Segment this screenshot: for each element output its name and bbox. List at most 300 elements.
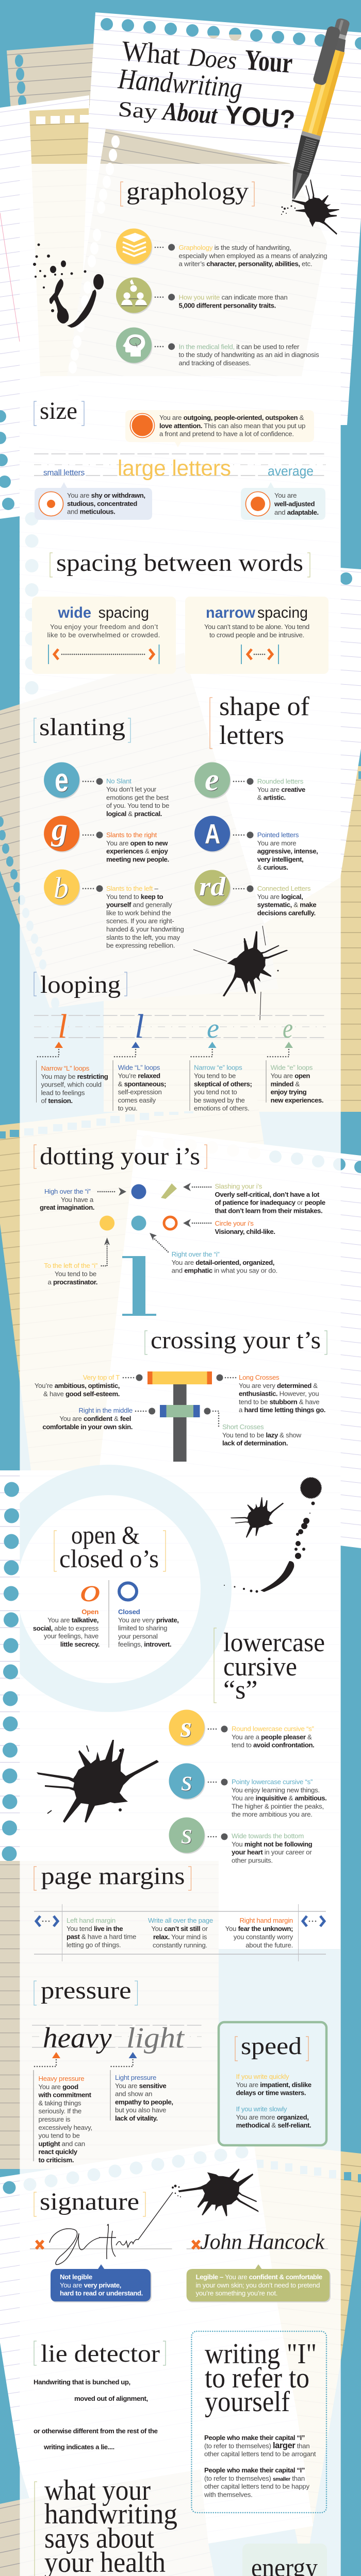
heading: lowercase cursive s: “s” — [223, 1675, 257, 1705]
section: graphology — [33, 178, 327, 367]
callout: legible: you’re something you’re not. — [196, 2290, 277, 2297]
item: no slant: logical & practical. — [106, 810, 162, 818]
heading: open & closed o's: open & — [71, 1520, 140, 1549]
wide e loops: Wide “e” loops — [271, 1064, 313, 1072]
panel: wide spacing: spacing — [99, 604, 149, 621]
text: write slowly: methodical & self-reliant. — [236, 2122, 311, 2129]
panel: wide spacing: like to be overwhelmed or crowded. — [47, 631, 160, 639]
label: high over: great imagination. — [40, 1204, 94, 1211]
large ink splatter — [37, 1740, 159, 1823]
light pressure: and show an — [115, 2090, 152, 2098]
heading: writing I — [205, 2338, 317, 2418]
wide l loops: & spontaneous; — [118, 1080, 166, 1088]
label: short crosses — [204, 1408, 302, 1447]
title: Does — [187, 42, 238, 75]
ink drips — [33, 243, 104, 328]
closed o: Closed — [118, 1608, 140, 1616]
label: long crosses: a hard time letting things go. — [239, 1406, 325, 1414]
panel: wide spacing — [32, 597, 176, 674]
wide l loops: l — [135, 1008, 144, 1045]
item: wide s — [169, 1818, 313, 1864]
label: to the left: You tend to be — [55, 1270, 96, 1278]
wide e loops: e — [283, 1013, 293, 1044]
item: slants right: Slants to the right — [106, 831, 157, 839]
label: right over: You are detail-oriented, organized, — [172, 1259, 274, 1266]
item: pointed letters: & curious. — [257, 863, 288, 871]
item: connected letters: rd — [199, 872, 226, 902]
section: looping — [34, 971, 326, 1112]
wide e loops: minded & — [271, 1080, 300, 1088]
title — [117, 35, 296, 134]
item: pointy s — [169, 1763, 326, 1818]
connector dots — [155, 343, 175, 350]
item: wide s: your heart in your career or — [232, 1849, 311, 1856]
item: wide s: other pursuits. — [232, 1856, 273, 1864]
heading: signature: signature — [40, 2188, 139, 2215]
item: slants left: Slants to the left – — [106, 885, 158, 892]
narrow e loops — [189, 1013, 252, 1112]
callout: not legible: hard to read or understand. — [60, 2290, 143, 2297]
narrow l loops: of tension. — [41, 1097, 73, 1105]
item: slants left: yourself and generally — [106, 901, 172, 909]
size samples: small letters — [43, 469, 85, 478]
closed o: your personal — [118, 1632, 158, 1640]
item: pointed letters: very intelligent, — [257, 855, 303, 863]
label: circle: Circle your i’s — [215, 1219, 254, 1227]
heavy pressure: pressure is — [38, 2115, 71, 2123]
item: pointed letters — [194, 816, 318, 871]
narrow e loops: you tend not to — [194, 1088, 237, 1096]
text: medical field: to the study of handwriting as an aid in diagnosis — [178, 351, 319, 359]
write all over the page — [148, 1917, 213, 1949]
open o — [33, 1573, 101, 1648]
text: definition: especially when employed as a means of analyzing — [178, 252, 327, 260]
open o: little secrecy. — [60, 1640, 100, 1648]
section: page margins — [34, 1862, 326, 1961]
heading: health — [35, 2475, 177, 2576]
item: slants left: like to work behind the — [106, 909, 171, 917]
right hand margin: you constantly worry — [234, 1933, 293, 1941]
item: slants right — [44, 812, 169, 863]
section: signature — [30, 2188, 331, 2302]
text: lie detector lines: Handwriting that is bunched up, — [34, 2378, 130, 2386]
item: pointed letters: You are more — [257, 839, 296, 847]
callout: large letters — [125, 410, 314, 447]
text: larger: People who make their capital “I” — [204, 2434, 305, 2442]
label: long crosses: tend to be stubborn & have — [239, 1398, 319, 1405]
label: slashing: Slashing your i’s — [215, 1182, 262, 1190]
heading: spacing between words: spacing between words — [56, 549, 303, 577]
callout: average letters: You are — [274, 492, 297, 499]
open o: your feelings, have — [44, 1632, 99, 1640]
item: pointy s: s — [181, 1765, 192, 1797]
item: rounded letters — [194, 762, 305, 802]
label: very top: Very top of T — [83, 1374, 120, 1381]
item: no slant: e — [55, 761, 69, 799]
text: smaller: other capital letters tend to be happy — [204, 2483, 309, 2490]
heading: shape of letters — [210, 692, 310, 750]
heavy pressure: uptight and can — [38, 2140, 85, 2147]
write all over the page: You can’t sit still or — [151, 1925, 208, 1933]
item: pointy s: the more ambitious you are. — [232, 1810, 313, 1818]
ink splatter — [193, 922, 299, 1020]
panel: wide spacing: You enjoy your freedom and don’t — [50, 623, 158, 631]
label: to the left — [44, 1238, 110, 1286]
item: round s: s — [180, 1711, 192, 1743]
size samples: average — [268, 463, 314, 479]
letter T with crossbars — [147, 1371, 212, 1462]
left hand margin: letting go of things. — [67, 1941, 121, 1948]
item: slants right: meeting new people. — [106, 855, 169, 863]
panel: narrow spacing: narrow — [206, 604, 256, 621]
connector dots — [155, 294, 175, 300]
label: slashing: of patience for inadequacy or people — [215, 1199, 325, 1207]
narrow l loops: You may be restricting — [41, 1073, 108, 1080]
heavy pressure: & taking things — [38, 2099, 81, 2107]
closed o: You are very private, — [118, 1616, 179, 1624]
item: connected letters: decisions carefully. — [257, 909, 316, 917]
label: long crosses: You are very determined & — [239, 1382, 318, 1389]
callout: not legible: You are very private, — [60, 2281, 121, 2289]
wide e loops: new experiences. — [271, 1096, 323, 1104]
item: rounded letters: e — [205, 762, 219, 798]
item: no slant: No Slant — [106, 777, 132, 785]
label: right over — [150, 1233, 277, 1275]
label: circle: Visionary, child-like. — [215, 1228, 275, 1235]
label: to the left: To the left of the “i” — [44, 1262, 97, 1269]
section: slanting — [34, 714, 184, 950]
open o: o — [80, 1573, 101, 1608]
section: crossing your t's — [35, 1327, 327, 1462]
text: write slowly: If you write slowly — [236, 2105, 287, 2113]
text: definition: a writer’s character, personality, abilities, etc. — [178, 260, 312, 268]
item: pointed letters: A — [205, 819, 220, 850]
item: slants right: experiences & enjoy — [106, 848, 168, 855]
item: connected letters: You are logical, — [257, 893, 303, 901]
heading: writing I: to refer to — [205, 2362, 309, 2394]
light pressure: empathy to people, — [115, 2098, 173, 2106]
ink splatter and drips — [224, 1478, 321, 1593]
title: About — [161, 96, 219, 129]
write all over the page: relax. Your mind is — [153, 1933, 207, 1941]
wide l loops: to you. — [118, 1105, 137, 1112]
narrow e loops: Narrow “e” loops — [194, 1064, 242, 1072]
label: long crosses — [217, 1374, 325, 1414]
label: very top: & have good self-esteem. — [43, 1390, 120, 1398]
label: slashing: that don’t learn from their mistakes. — [215, 1207, 322, 1214]
heading: lowercase cursive s — [214, 1628, 325, 1705]
item: no slant — [44, 761, 169, 818]
label: to the left: a procrastinator. — [47, 1278, 97, 1286]
left hand margin: You tend live in the — [67, 1925, 123, 1933]
label: short crosses: lack of determination. — [222, 1439, 288, 1447]
heading: writing I: yourself — [205, 2386, 290, 2418]
item: rounded letters: & artistic. — [257, 794, 286, 802]
legible signature: John Hancock — [200, 2230, 325, 2254]
item: no slant: emotions get the best — [106, 793, 169, 801]
heavy pressure: excessively heavy, — [38, 2124, 92, 2131]
callout: average letters: and adaptable. — [274, 509, 319, 516]
heavy pressure — [34, 2022, 112, 2164]
icon: stack of books — [116, 229, 153, 265]
label: long crosses: Long Crosses — [239, 1374, 280, 1381]
item: wide s: Wide towards the bottom — [232, 1832, 304, 1840]
item: round s — [169, 1709, 314, 1749]
item: slants left: slants to the left, you may — [106, 934, 180, 941]
item: wide s: You might not be following — [232, 1840, 312, 1848]
text: lie detector lines — [34, 2378, 158, 2451]
wide l loops — [113, 1008, 166, 1112]
item: slants left — [44, 870, 184, 950]
narrow l loops: l — [58, 1008, 67, 1045]
heading: writing I: writing "I" — [205, 2338, 317, 2370]
wide e loops — [266, 1013, 323, 1104]
right hand margin: about the future. — [245, 1941, 293, 1949]
section: open and closed o's — [33, 1520, 179, 1648]
heavy pressure: react quickly — [38, 2148, 78, 2156]
callout: large letters: a front and pretend to have a lot of confidence. — [159, 430, 294, 438]
panel: narrow spacing: to crowd people and be intrusive. — [209, 631, 304, 639]
icon: head with brain — [116, 328, 153, 364]
title: What — [121, 35, 182, 72]
callout: small letters: studious, concentrated — [67, 500, 137, 507]
callout: large letters: You are outgoing, people-oriented, outspoken & — [159, 414, 304, 421]
item: pointy s: You enjoy learning new things. — [232, 1786, 320, 1794]
item: pointed letters: Pointed letters — [257, 831, 299, 839]
left hand margin — [36, 1916, 136, 1948]
light pressure: Light pressure — [115, 2074, 156, 2081]
heading: health: handwriting — [44, 2498, 177, 2530]
callout: large letters: love attention. This can also mean that you put up — [159, 422, 305, 430]
text: larger: (to refer to themselves) larger than — [204, 2441, 309, 2450]
text: write quickly: delays or time wasters. — [236, 2089, 306, 2097]
title: Your — [243, 44, 293, 79]
light pressure: You are sensitive — [115, 2082, 166, 2090]
left hand margin: past & have a hard time — [67, 1933, 136, 1941]
light pressure: light — [126, 2022, 185, 2054]
item: wide s: s — [181, 1818, 192, 1850]
callout: average letters: well-adjusted — [274, 500, 315, 508]
label: slashing — [183, 1182, 325, 1214]
section: lowercase cursive s — [169, 1628, 326, 1864]
label: circle — [183, 1219, 275, 1235]
callout: legible: in your own skin; you don’t need to pretend — [196, 2281, 320, 2289]
label: right in the middle: comfortable in your own skin. — [42, 1423, 133, 1431]
icon: yellow pen — [279, 15, 353, 206]
item: pointy s: The higher & pointier the peaks, — [232, 1802, 324, 1810]
section: dotting your i's — [34, 1143, 325, 1316]
heading: health: says about — [44, 2522, 154, 2554]
light pressure — [110, 2022, 185, 2122]
light pressure: but you also have — [115, 2106, 166, 2114]
narrow l loops: Narrow “L” loops — [41, 1064, 90, 1072]
heading: slanting: slanting — [39, 714, 125, 741]
write all over the page: Write all over the page — [148, 1917, 213, 1924]
text: smaller: with themselves. — [204, 2490, 252, 2498]
closed o — [118, 1583, 179, 1648]
ink splatter above signature — [172, 2151, 270, 2233]
label: right in the middle: You are confident & feel — [59, 1415, 131, 1422]
label: high over: You have a — [61, 1196, 94, 1204]
narrow l loops: yourself, which could — [41, 1081, 102, 1089]
item: connected letters: Connected Letters — [257, 885, 311, 892]
size samples: large letters — [118, 456, 231, 481]
text: write quickly: You are impatient, dislike — [236, 2081, 311, 2089]
heading: open & closed o's: closed o’s — [59, 1544, 159, 1573]
text: medical field: and tracking of diseases. — [178, 359, 251, 367]
narrow e loops: e — [207, 1013, 219, 1044]
panel: speed — [219, 2022, 326, 2145]
item: connected letters: systematic, & make — [257, 901, 316, 909]
heading: shape of letters: shape of — [219, 692, 310, 721]
heavy pressure: seriously. If the — [38, 2107, 81, 2115]
callout: average letters — [241, 482, 325, 520]
text: smaller: People who make their capital “I” — [204, 2466, 305, 2474]
section: pressure — [32, 1977, 202, 2164]
text: traits: 5,000 different personality traits. — [178, 302, 276, 309]
narrow e loops: skeptical of others; — [194, 1080, 252, 1088]
open o: social, able to express — [33, 1624, 99, 1632]
item: slants left: handed & your handwriting — [106, 925, 184, 933]
closed o: feelings, introvert. — [118, 1640, 171, 1648]
label: high over — [40, 1188, 126, 1211]
heavy pressure: Heavy pressure — [38, 2075, 84, 2082]
label: slashing: Overly self-critical, don’t have a lot — [215, 1191, 320, 1198]
text: smaller: (to refer to themselves) smaller than — [204, 2475, 305, 2482]
label: long crosses: enthusiastic. However, you — [239, 1390, 319, 1398]
item: round s: You are a people pleaser & — [232, 1733, 312, 1741]
section: shape of letters — [194, 692, 318, 917]
right hand margin: You fear the unknown; — [225, 1925, 293, 1933]
item: slants left: b — [54, 871, 69, 905]
heading: speed: speed — [241, 2032, 302, 2060]
label: right in the middle — [42, 1406, 155, 1431]
item: round s: tend to avoid confrontation. — [232, 1741, 314, 1749]
heading: size: size — [40, 397, 77, 425]
label: short crosses: You tend to be lazy & show — [222, 1431, 301, 1439]
open o: You are talkative, — [47, 1616, 99, 1624]
wide e loops: enjoy trying — [271, 1088, 307, 1096]
heading: lowercase cursive s: cursive — [223, 1652, 297, 1682]
heading: page margins: page margins — [41, 1862, 185, 1890]
letter i with dot variants — [100, 1183, 177, 1316]
section: lie detector — [34, 2340, 166, 2451]
large pale letter O behind open and closed section — [0, 1465, 232, 1712]
heading: health: what your — [44, 2475, 151, 2506]
text: lie detector lines: writing indicates a lie.... — [43, 2443, 114, 2451]
narrow l loops: lead to feelings — [41, 1089, 85, 1096]
text: write slowly: You are more organized, — [236, 2113, 308, 2121]
title: YOU? — [224, 100, 296, 134]
text: lie detector lines: or otherwise different from the rest of the — [34, 2427, 158, 2435]
item: slants right: You are open to new — [106, 839, 168, 847]
text: write quickly: If you write quickly — [236, 2073, 289, 2080]
right hand margin — [225, 1916, 324, 1949]
callout: small letters: and meticulous. — [67, 508, 115, 516]
connector dots — [155, 244, 175, 250]
panel: narrow spacing: spacing — [257, 604, 308, 621]
panel: narrow spacing: You can’t stand to be alone. You tend — [204, 623, 309, 631]
item: no slant: of you. You tend to be — [106, 802, 169, 809]
callout: not legible — [51, 2264, 152, 2302]
item: slants left: scenes. If you are right- — [106, 917, 174, 925]
heavy pressure: heavy — [43, 2022, 112, 2054]
narrow l loops — [36, 1008, 108, 1105]
item: round s: Round lowercase cursive “s” — [232, 1725, 314, 1733]
callout: legible: Legible – You are confident & comfortable — [196, 2273, 322, 2281]
label: right in the middle: Right in the middle — [79, 1406, 133, 1414]
label: right over: and emphatic in what you say or do. — [172, 1267, 277, 1275]
heading: shape of letters: letters — [219, 721, 284, 750]
heading: graphology: graphology — [126, 178, 249, 205]
section: size — [34, 397, 326, 520]
item: rounded letters: Rounded letters — [257, 777, 304, 785]
right hand margin: Right hand margin — [239, 1917, 293, 1924]
left hand margin: Left hand margin — [67, 1917, 116, 1924]
write all over the page: constantly running. — [153, 1941, 207, 1949]
title: Say — [117, 97, 158, 124]
open o: Open — [81, 1608, 99, 1616]
wide l loops: You’re relaxed — [118, 1072, 160, 1080]
panel: energy levels — [242, 2544, 327, 2576]
item: no slant: You don’t let your — [106, 785, 157, 793]
heading: crossing your t's: crossing your t’s — [151, 1327, 321, 1354]
heading: pressure: pressure — [41, 1977, 131, 2004]
section: spacing between words — [32, 549, 329, 674]
callout: small letters — [35, 482, 152, 520]
narrow e loops: emotions of others. — [194, 1105, 249, 1112]
item: pointy s: Pointy lowercase cursive “s” — [232, 1778, 313, 1786]
text: medical field: In the medical field, it can be used to refer — [178, 343, 299, 350]
narrow e loops: You tend to be — [194, 1072, 236, 1080]
heading: lowercase cursive s: lowercase — [223, 1628, 325, 1657]
light pressure: lack of vitality. — [115, 2114, 158, 2122]
item: pointed letters: aggressive, intense, — [257, 848, 318, 855]
icon: people — [116, 277, 153, 314]
label: right over: Right over the “i” — [172, 1250, 220, 1258]
panel: narrow spacing — [185, 597, 329, 674]
closed o: limited to sharing — [118, 1624, 167, 1632]
callout: small letters: You are shy or withdrawn, — [67, 492, 145, 499]
text: traits: How you write can indicate more than — [178, 294, 287, 301]
label: short crosses: Short Crosses — [222, 1423, 264, 1431]
heading: open & closed o's — [54, 1520, 166, 1573]
item: slants right: g — [51, 812, 68, 847]
heading: dotting your i's: dotting your i’s — [40, 1143, 200, 1170]
item: pointy s: You are inquisitive & ambitious. — [232, 1794, 326, 1802]
heavy pressure: You are good — [38, 2083, 78, 2091]
heading: lie detector: lie detector — [41, 2340, 160, 2367]
section: what your handwriting says about your health — [33, 2475, 232, 2576]
item: rounded letters: You are creative — [257, 786, 305, 793]
label: very top — [35, 1374, 142, 1398]
heading: looping: looping — [40, 971, 121, 998]
label: very top: You’re ambitious, optimistic, — [35, 1382, 120, 1389]
callout: legible — [187, 2264, 331, 2302]
callout: not legible: Not legible — [60, 2273, 92, 2281]
icon: x marks — [36, 2241, 200, 2249]
title: Handwriting — [117, 63, 243, 104]
item: slants left: You tend to keep to — [106, 893, 163, 901]
label: high over: High over the “i” — [44, 1188, 91, 1195]
wide e loops: You are open — [271, 1072, 310, 1080]
wide l loops: self-expression — [118, 1088, 162, 1096]
size samples — [43, 456, 314, 481]
text: definition: Graphology is the study of handwriting, — [178, 244, 291, 251]
narrow e loops: be swayed by the — [194, 1096, 245, 1104]
wide l loops: comes easily — [118, 1096, 156, 1104]
panel: writing I to refer to yourself — [191, 2331, 326, 2513]
